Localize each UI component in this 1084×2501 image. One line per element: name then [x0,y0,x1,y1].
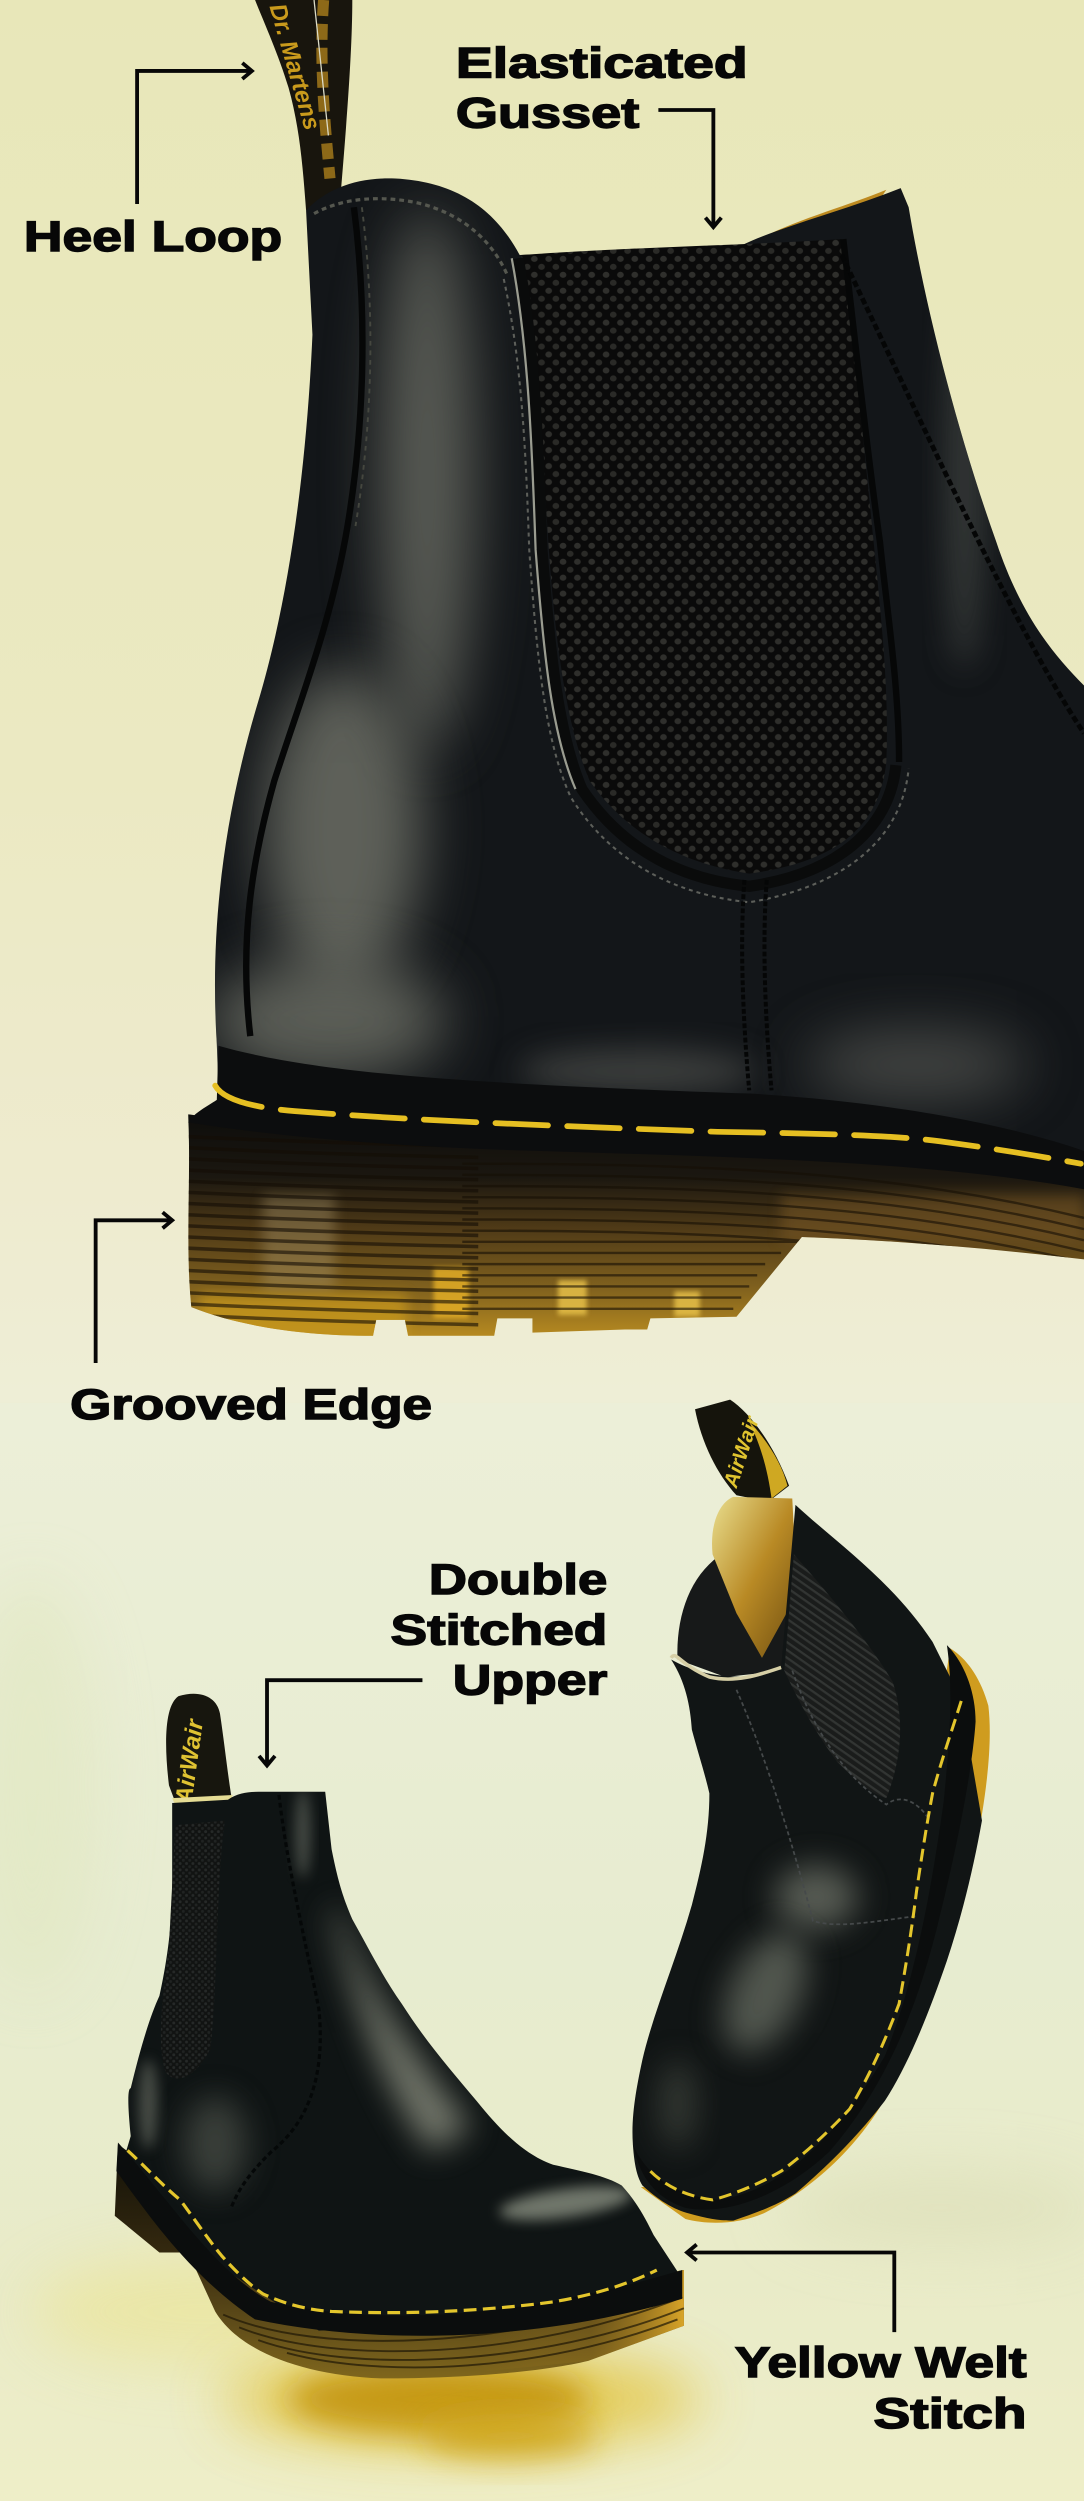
text: Double Stitched Upper: Upper [453,1657,608,1705]
pull loop [695,1400,789,1502]
heel loop pull tab: Dr. Martens [264,1,325,133]
label: Grooved Edge callout [70,1212,432,1429]
text: Elasticated Gusset: Gusset [456,90,639,138]
pull loop: AirWair [719,1413,764,1491]
label: Elasticated Gusset callout [456,39,748,227]
arrow: heel loop [137,63,252,204]
elastic panel ribbed [784,1554,900,1798]
leather upper [632,1505,982,2221]
leather highlights [139,1789,634,2227]
arrow: double stitched upper [259,1680,422,1765]
sole [115,2144,684,2378]
arrow: yellow welt stitch [687,2245,894,2332]
text: Elasticated Gusset: Elasticated [456,39,748,87]
seams [231,1795,320,2208]
text: Grooved Edge: Grooved Edge [70,1381,432,1429]
sole [641,1648,990,2223]
sole gold toe tint [478,2270,684,2372]
label: Yellow Welt Stitch callout [687,2245,1027,2438]
arrow: gusset [658,110,721,227]
text: Double Stitched Upper: Stitched [391,1606,607,1654]
leather highlights [658,1865,858,2149]
leather upper [215,178,1084,1188]
grooved sole [175,1108,1084,1339]
text: Yellow Welt Stitch: Yellow Welt [735,2339,1027,2387]
cream collar edge [671,1656,781,1679]
shadow glow beneath lower boots [0,1578,1084,2458]
yellow welt stitch [128,2150,657,2313]
text: Double Stitched Upper: Double [429,1556,607,1604]
lining tab [172,1795,233,1824]
illustration: large close-up boot [175,0,1084,1339]
pull loop [166,1694,233,1811]
illustration: upper right floating boot [632,1400,990,2223]
elastic gusset panel [521,239,887,874]
background: bottom photo backdrop [0,1403,1084,2501]
tan inner lining [712,1497,797,1658]
welt [116,2142,682,2336]
welt band [188,1046,1084,1189]
welt band [633,1645,976,2210]
heel loop pull tab [255,0,352,210]
illustration: lower left boot [115,1694,684,2378]
stitched seams [246,199,1084,1090]
pull loop: AirWair [170,1716,209,1806]
label: Heel Loop callout [24,63,282,261]
label: Double Stitched Upper callout [259,1556,608,1765]
leather highlights [207,207,1028,1100]
text: Yellow Welt Stitch: Stitch [874,2390,1027,2438]
yellow welt stitch [650,1701,961,2200]
arrow: grooved edge [96,1212,172,1363]
sole grooves [223,2286,684,2367]
elastic panel [161,1820,225,2079]
text: Heel Loop: Heel Loop [24,213,282,261]
background: top photo backdrop [0,0,1084,1403]
seams [736,1671,928,1924]
yellow welt stitching [215,1086,1081,1164]
dark boot interior [677,1556,797,1677]
tan lining inside collar [743,190,886,252]
leather upper [121,1792,681,2331]
